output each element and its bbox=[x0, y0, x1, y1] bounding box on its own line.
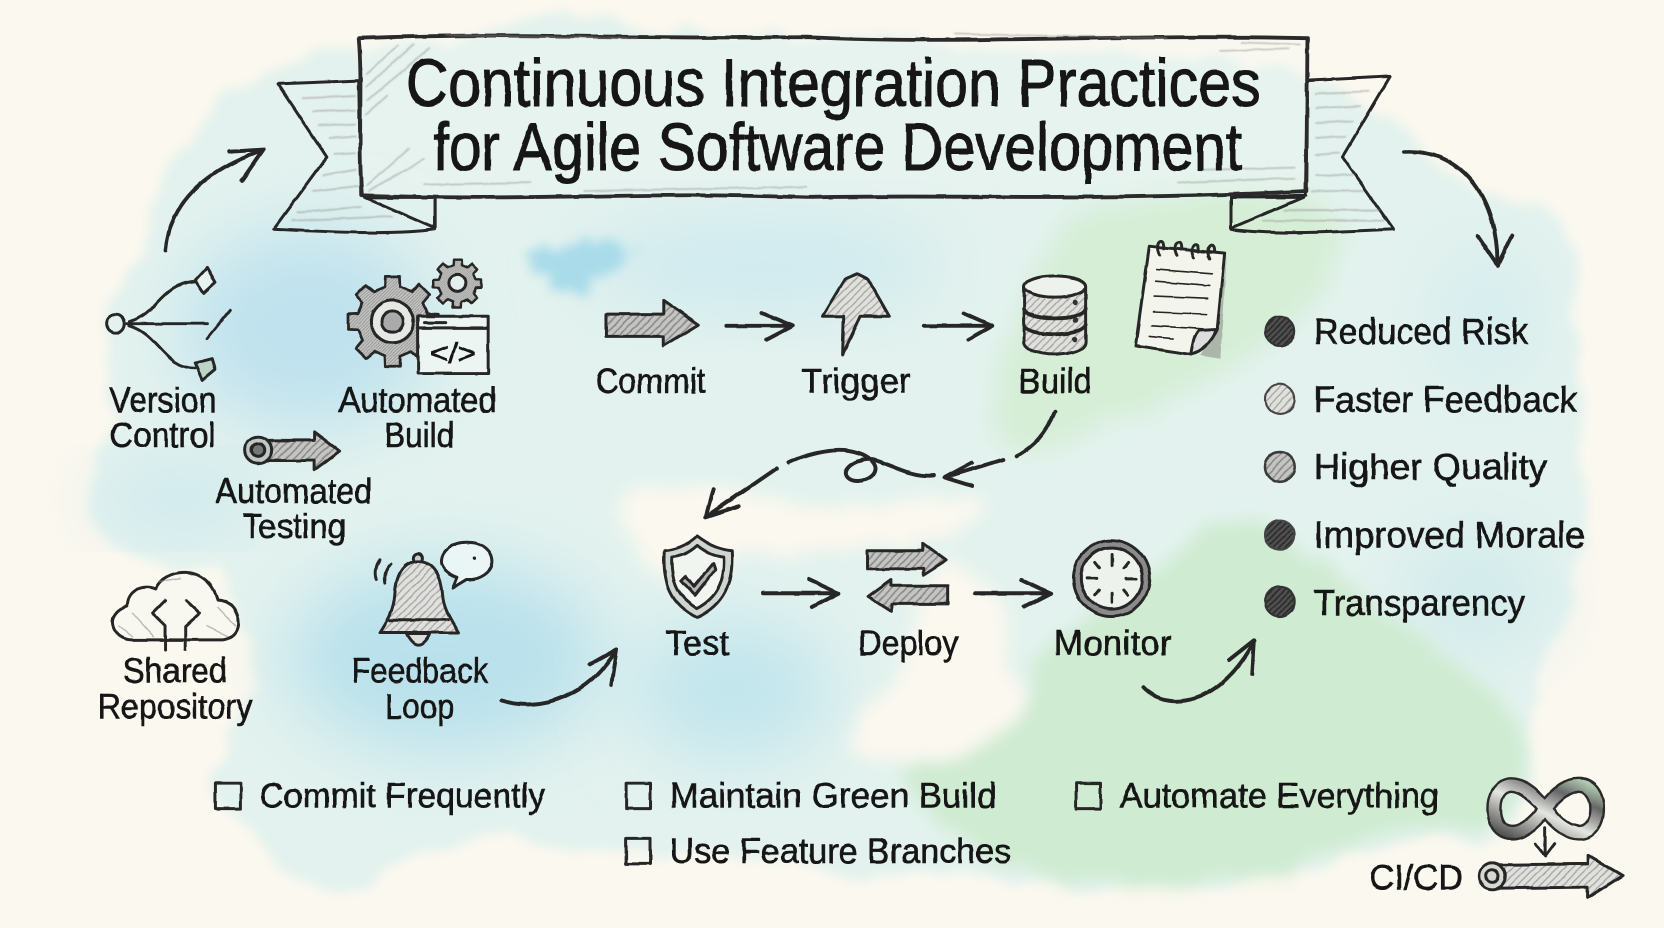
icon: database bbox=[1024, 276, 1086, 354]
icon: commit arrow bbox=[606, 300, 698, 346]
practice: automated testing: Testing bbox=[242, 507, 346, 546]
step: trigger bbox=[801, 274, 911, 401]
step: test: Test bbox=[665, 624, 729, 663]
banner panel bbox=[359, 36, 1307, 197]
benefits list bbox=[1265, 310, 1585, 624]
arrow: version control to title bbox=[166, 150, 263, 250]
step: trigger: Trigger bbox=[801, 362, 911, 401]
step: commit: Commit bbox=[595, 362, 706, 401]
icon: gears and code window: </> bbox=[430, 338, 476, 370]
step: deploy bbox=[859, 543, 959, 663]
checklist bbox=[215, 777, 1439, 871]
step: test bbox=[664, 536, 733, 663]
arrow: monitor to benefits bbox=[1143, 640, 1254, 701]
icon: branching bbox=[107, 267, 230, 380]
CI/CD emblem bbox=[1369, 785, 1623, 898]
step: deploy: Deploy bbox=[859, 624, 959, 663]
step: build bbox=[1019, 276, 1092, 401]
arrow: title to benefits bbox=[1404, 152, 1512, 265]
arrow: commit to trigger bbox=[726, 313, 793, 340]
title text: Continuous Integration Practices bbox=[405, 46, 1261, 121]
practice: shared repository: Shared bbox=[123, 651, 227, 690]
icon: target arrow bbox=[245, 432, 340, 470]
CI/CD emblem: CI/CD bbox=[1369, 858, 1463, 897]
icon: pipeline arrow bbox=[1479, 855, 1623, 898]
check item: automate everything: Automate Everything bbox=[1120, 777, 1439, 816]
icon: clock bbox=[1073, 540, 1150, 617]
benefit: higher quality: Higher Quality bbox=[1314, 446, 1548, 488]
icon: infinity loop bbox=[1494, 785, 1597, 833]
practice: shared repository bbox=[98, 572, 253, 726]
step: monitor: Monitor bbox=[1054, 624, 1172, 663]
icon: shield bbox=[664, 536, 733, 618]
icon: bell and speech bubble bbox=[376, 542, 492, 645]
arrow: trigger to build bbox=[924, 313, 992, 340]
title banner bbox=[274, 34, 1393, 233]
benefit: transparency: Transparency bbox=[1314, 582, 1525, 624]
right ribbon tail bbox=[1231, 76, 1393, 233]
left fold bbox=[365, 197, 435, 228]
arrow: build to test (looping) bbox=[706, 412, 1055, 517]
arrow: loop to pipeline bbox=[1536, 828, 1555, 856]
practice: automated build bbox=[339, 259, 497, 455]
arrow: test to deploy bbox=[763, 579, 838, 607]
practice: feedback loop bbox=[351, 542, 492, 726]
practice: version control: Control bbox=[109, 416, 215, 455]
title text: for Agile Software Development bbox=[433, 110, 1242, 185]
arrow: deploy to monitor bbox=[975, 579, 1051, 607]
icon: trigger bolt arrow bbox=[822, 274, 889, 354]
practice: automated testing bbox=[215, 432, 372, 546]
title text bbox=[405, 46, 1261, 185]
icon: cloud with code bbox=[113, 572, 239, 649]
check item: commit frequently: Commit Frequently bbox=[259, 777, 546, 816]
practice: feedback loop: Feedback bbox=[351, 651, 489, 690]
practice: shared repository: Repository bbox=[98, 687, 253, 726]
left ribbon tail bbox=[274, 81, 435, 233]
right fold bbox=[1231, 197, 1303, 228]
practice: feedback loop: Loop bbox=[385, 687, 454, 726]
practice: automated build: Automated bbox=[339, 381, 497, 420]
step: build: Build bbox=[1019, 362, 1092, 401]
practice: automated build: Build bbox=[384, 416, 454, 455]
benefit: faster feedback: Faster Feedback bbox=[1314, 378, 1577, 420]
step: monitor bbox=[1054, 540, 1172, 663]
icon: notepad bbox=[1136, 241, 1227, 359]
icon: two-way arrows bbox=[867, 543, 948, 611]
icon: gears and code window bbox=[347, 259, 488, 374]
benefit: reduced risk: Reduced Risk bbox=[1314, 310, 1529, 352]
arrow: feedback loop to test bbox=[501, 649, 617, 704]
practice: version control: Version bbox=[109, 381, 216, 420]
check item: maintain green build: Maintain Green Build bbox=[670, 777, 996, 816]
step: commit bbox=[595, 300, 706, 401]
check item: use feature branches: Use Feature Branches bbox=[670, 832, 1011, 871]
practice: automated testing: Automated bbox=[215, 472, 372, 511]
benefit: improved morale: Improved Morale bbox=[1314, 514, 1585, 556]
practice: version control bbox=[107, 267, 230, 455]
